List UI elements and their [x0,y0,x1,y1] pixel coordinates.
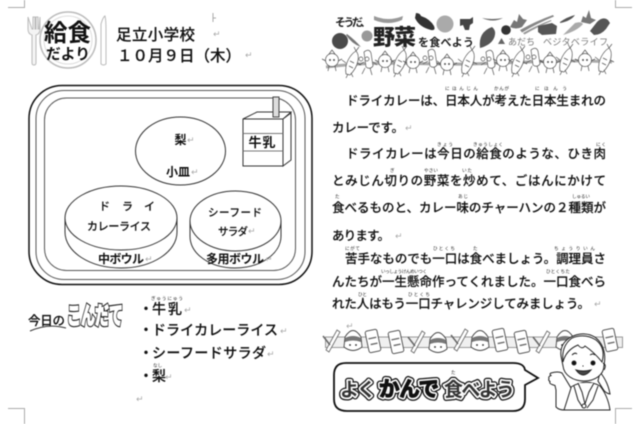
article text: かんが [494,85,509,92]
article text: ちょうりいん [554,246,595,252]
article text [332,85,606,332]
school lunch tray [29,86,312,284]
multipurpose bowl: seafood salad [190,191,281,268]
speech bubble: chew well and eat: 食べよう [444,379,515,401]
speech bubble: chew well and eat: かんで [379,378,439,401]
article text: ↵ [346,322,354,332]
article text: きゅうしょく [473,141,503,148]
milk carton [243,97,291,166]
small plate: pear: 小皿 [166,165,190,179]
article text: ↵ [395,232,403,242]
article text: ドライカレーは今日の給食のような、ひき肉 [346,146,606,161]
menu list: ぎゅうにゅう [151,295,183,302]
article text: きょう [437,141,453,148]
small plate: pear: ↵ [187,136,195,146]
logo: kyushoku dayori: だより [46,46,90,63]
banner: eat vegetables: 野菜 [373,25,416,50]
school name and date: ↵ [245,51,253,61]
banner: eat vegetables: ベジタベライフ [543,37,608,47]
menu list: ↵ [267,350,275,360]
medium bowl: dry curry rice: 中ボウル [98,251,144,266]
small plate: pear: 梨 [174,133,187,147]
article text: れた人はもう一口チャレンジしてみましょう。 [332,297,590,311]
menu list: ドライカレーライス [152,322,278,338]
medium bowl: dry curry rice [65,186,177,268]
article text: ↵ [405,124,413,134]
article text: カレーです。 [332,121,404,135]
menu list [136,295,288,405]
article text: やさい [424,167,438,174]
speech bubble: chew well and eat: かんで [379,378,439,401]
multipurpose bowl: seafood salad: 多用ボウル [206,251,264,266]
article text: あじ [458,194,468,200]
article text: ひとくち [408,292,430,298]
speech bubble: chew well and eat: よく [340,380,376,401]
illustration: woman [549,334,610,410]
small plate: pear [136,117,226,185]
menu list: ↵ [136,395,144,405]
heading: today's menu: こんだて [67,303,123,330]
article text: ひとくちた [546,269,570,275]
article text: ひとくち [433,246,455,252]
article text: いっしょうけんめいつく [381,269,427,275]
menu list: ↵ [184,306,192,316]
article text: た [335,194,340,200]
article text: いた [462,168,472,174]
menu list: ↵ [280,327,288,337]
banner: eat vegetables: そうだ、 [335,16,371,29]
multipurpose bowl: seafood salad: サラダ [218,225,248,238]
school name and date: １０月９日（木） [117,47,241,65]
multipurpose bowl: seafood salad: シーフード [208,207,262,219]
menu list: ・ [139,322,153,338]
article text: とみじん切りの野菜を炒めて、ごはんにかけて [332,173,606,188]
menu list: なし [153,362,163,368]
medium bowl: dry curry rice: ↵ [145,255,153,265]
article text: んたちが一生懸命作ってくれました。一口食べら [332,274,606,289]
menu list: 梨 [152,368,166,384]
menu list: シーフードサラダ [152,345,266,361]
article text: あります。 [332,229,390,243]
article text: 苦手なものでも一口は食べましょう。調理員さ [345,251,606,266]
menu list: ・ [139,301,153,317]
menu list: ・ [139,368,153,384]
milk carton: 牛乳 [248,135,276,150]
menu list: 牛乳 [152,301,182,317]
article text: 食べるものと、カレー味のチャーハンの２種類が [332,200,606,215]
article text: にがて [345,245,360,252]
school name and date: ↵ [213,30,221,40]
menu list: ・ [139,345,153,361]
article text: にく [596,142,606,148]
speech bubble: chew well and eat: よく [340,380,376,401]
speech bubble: chew well and eat: かんで [379,378,439,401]
logo: kyushoku dayori [28,12,106,68]
speech bubble: chew well and eat [334,363,538,411]
article text: にほんじん [445,86,478,92]
banner: eat vegetables: あだち [508,37,535,47]
heading: today's menu [28,303,123,331]
multipurpose bowl: seafood salad: ↵ [265,255,273,265]
multipurpose bowl: seafood salad: ↵ [248,227,256,237]
medium bowl: dry curry rice: ド [99,201,110,213]
heading: today's menu: こんだて [67,303,123,330]
school name and date: 足立小学校 [116,26,195,44]
medium bowl: dry curry rice: イ [144,201,155,213]
article text: ↵ [594,300,602,310]
character band: chew well [323,328,622,354]
article text: ひと [358,292,367,297]
school name and date [116,13,253,65]
logo: kyushoku dayori: 給食 [44,20,91,47]
character band: vegetables [322,44,614,78]
article text: ぎ [390,167,395,173]
medium bowl: dry curry rice: カレーライス [87,220,151,233]
article text: しゅるい [572,194,590,200]
banner: eat vegetables: を食べよう [418,35,474,49]
article text: にほんう [535,86,567,92]
article text: た [473,246,478,252]
speech bubble: chew well and eat: た [451,370,456,376]
heading: today's menu: 今日の [28,313,65,328]
small plate: pear: ↵ [191,168,199,178]
speech bubble: chew well and eat: 食べよう [444,379,515,401]
article text: ドライカレーは、日本人が考えた日本生まれの [346,93,606,108]
speech bubble: chew well and eat: 食べよう [444,379,515,401]
icon: vegetables [332,10,610,49]
banner: eat vegetables [332,10,610,50]
menu list: ↵ [165,373,173,383]
speech bubble: chew well and eat: よく [340,380,376,401]
medium bowl: dry curry rice: ラ [122,200,133,213]
